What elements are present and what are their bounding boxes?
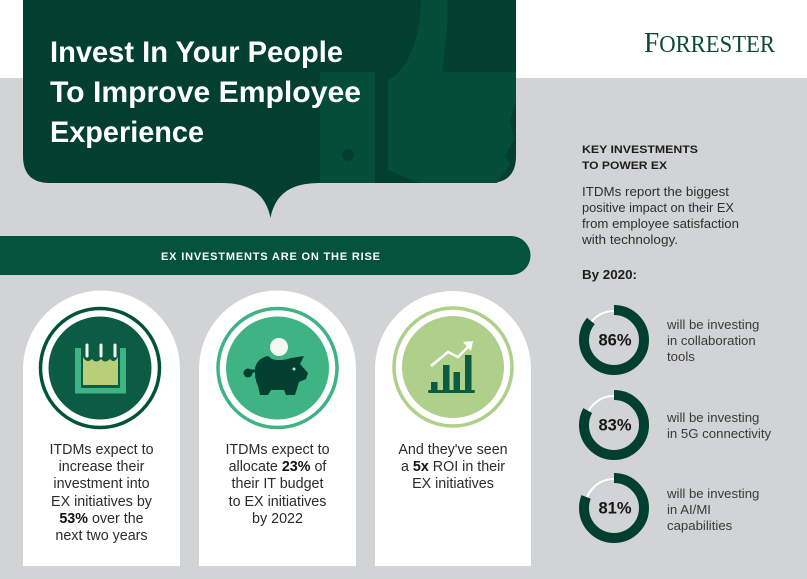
text: EX initiatives	[412, 476, 494, 492]
text	[49, 442, 154, 544]
text: ITDMs expect to	[49, 442, 154, 458]
label 83%: in 5G connectivity	[667, 426, 771, 441]
key investments heading	[582, 144, 698, 172]
card 2	[199, 290, 356, 566]
card 1	[23, 291, 180, 566]
donut 86%	[584, 310, 644, 370]
key investments text: with technology.	[581, 232, 678, 247]
donut 81%	[584, 478, 644, 538]
key investments heading: KEY INVESTMENTS	[582, 144, 698, 156]
icon: growth chart	[394, 308, 512, 426]
text: a 5x ROI in their	[401, 459, 505, 475]
key investments text: positive impact on their EX	[582, 200, 734, 215]
label 83%	[666, 410, 771, 441]
text: next two years	[55, 528, 148, 544]
icon: thumbs up watermark	[320, 0, 516, 183]
label 81%: in AI/MI	[667, 502, 711, 517]
key investments text	[581, 184, 739, 247]
donut 81%: 81%	[598, 500, 632, 518]
banner	[0, 236, 530, 275]
label 83%: will be investing	[666, 410, 759, 425]
icon: piggy bank	[218, 308, 337, 428]
text: And they've seen	[398, 442, 508, 458]
title text	[50, 36, 361, 149]
text: by 2022	[252, 511, 303, 527]
logo: Forrester: FORRESTER	[644, 27, 775, 59]
key investments heading: TO POWER EX	[582, 160, 667, 172]
icon: calendar	[40, 308, 160, 428]
text: to EX initiatives	[229, 494, 326, 510]
key investments text: from employee satisfaction	[582, 216, 739, 231]
text: their IT budget	[232, 476, 323, 492]
text: 53% over the	[59, 511, 144, 527]
label 86%: will be investing	[666, 317, 759, 332]
label 86%: tools	[667, 349, 695, 364]
label 81%	[666, 486, 759, 533]
label 81%: capabilities	[667, 518, 733, 533]
text: allocate 23% of	[229, 459, 326, 475]
title text: Invest In Your People	[50, 36, 343, 69]
text: ITDMs expect to	[225, 442, 330, 458]
label 81%: will be investing	[666, 486, 759, 501]
text: EX initiatives by	[51, 494, 153, 510]
text	[398, 442, 508, 492]
donut 83%: 83%	[598, 416, 632, 434]
text: increase their	[59, 459, 145, 475]
card 3	[375, 291, 531, 566]
title text: To Improve Employee	[50, 76, 361, 109]
donut 86%: 86%	[598, 332, 632, 350]
text	[225, 442, 330, 527]
donut 83%	[584, 395, 644, 455]
label 86%	[666, 317, 759, 364]
text: investment into	[53, 476, 150, 492]
banner: EX INVESTMENTS ARE ON THE RISE	[161, 251, 380, 263]
title panel	[23, 0, 516, 218]
title text: Experience	[50, 116, 204, 149]
key investments text: ITDMs report the biggest	[582, 184, 729, 199]
by 2020 label: By 2020:	[582, 267, 637, 282]
label 86%: in collaboration	[667, 333, 756, 348]
